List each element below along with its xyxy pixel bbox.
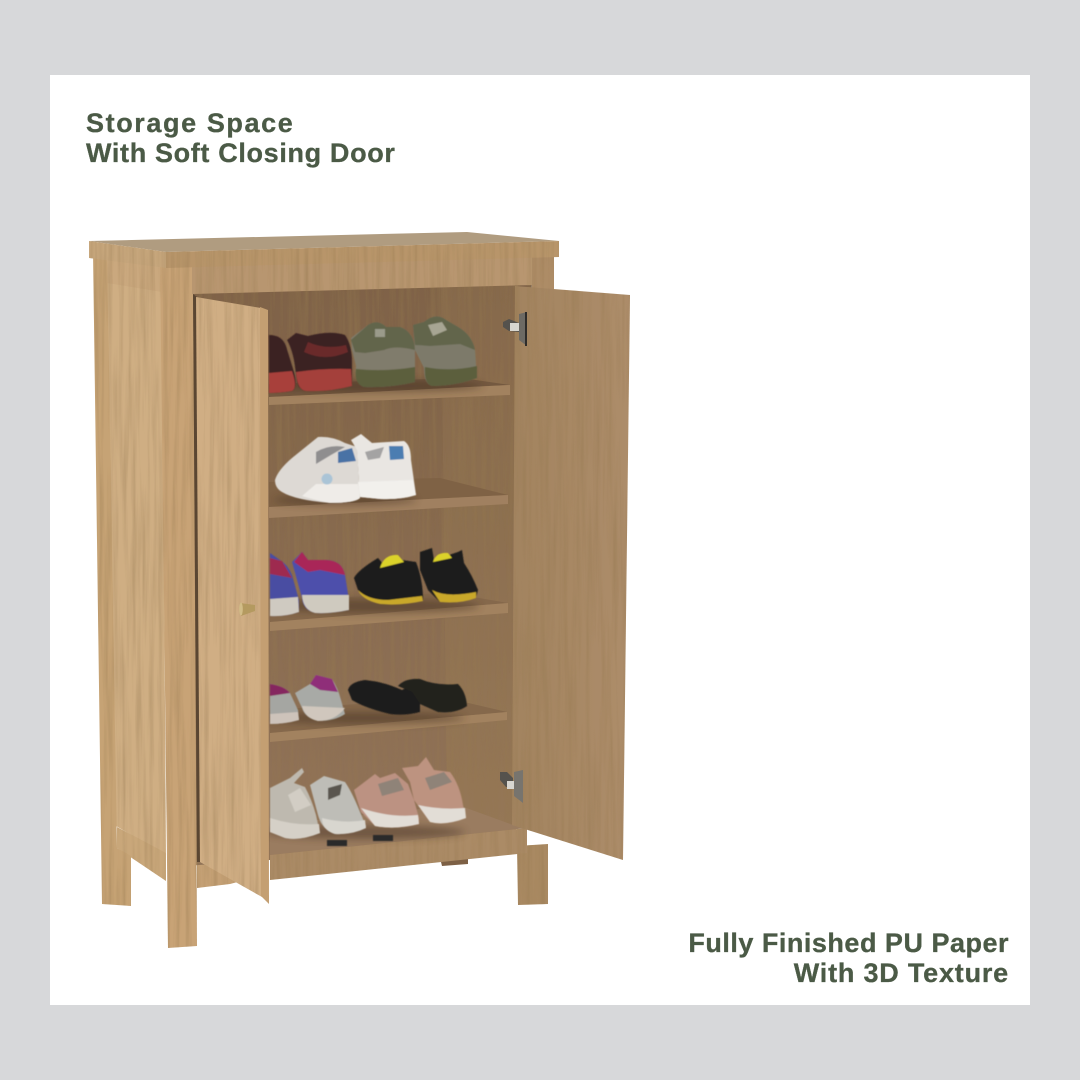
- heading: storage space: With Soft Closing Door: [86, 138, 396, 168]
- cabinet interior back wall: [185, 280, 532, 866]
- bottom hinge: [500, 770, 523, 803]
- top hinge: [503, 312, 527, 346]
- panel: white card: [50, 75, 1030, 1005]
- right post: [532, 248, 554, 296]
- left rear post and leg: [93, 250, 131, 906]
- caption: finish: Fully Finished PU Paper: [688, 928, 1009, 958]
- shelves: [269, 378, 527, 880]
- shoes row 1: [269, 316, 477, 393]
- heading: storage space: [86, 108, 396, 168]
- left side top rail: [106, 255, 162, 292]
- shoes row 5: [270, 757, 466, 846]
- door knob: [239, 602, 255, 616]
- heading: storage space: Storage Space: [86, 108, 294, 138]
- front left post: [160, 258, 197, 948]
- caption: finish: [688, 928, 1009, 988]
- cabinet top: [89, 232, 559, 268]
- door gap shadow: [193, 294, 200, 862]
- shoes row 4: [270, 675, 467, 724]
- left door, open: [196, 297, 269, 904]
- interior right side wall: [441, 284, 518, 828]
- cabinet back feature and base: [197, 844, 548, 905]
- shoe shadows: [265, 380, 483, 839]
- caption: finish: With 3D Texture: [794, 958, 1009, 988]
- shoes row 3: [270, 548, 478, 616]
- shoes row 2: white sneakers: [275, 434, 416, 503]
- front top rail: [192, 250, 534, 294]
- left side rail: [117, 827, 166, 881]
- right door, open: [512, 286, 630, 860]
- left side panel: [106, 255, 166, 855]
